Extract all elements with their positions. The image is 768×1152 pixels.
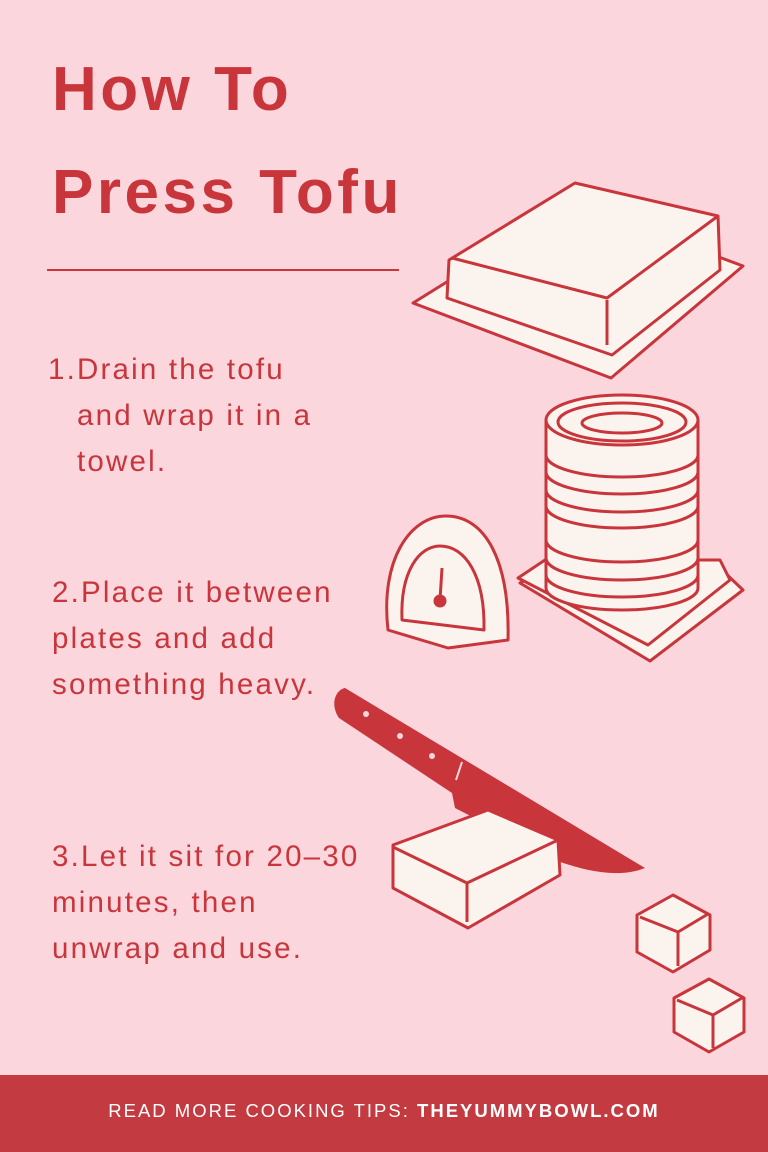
- step 3: [52, 840, 360, 965]
- title: Press Tofu: [52, 158, 403, 227]
- title: [52, 55, 403, 227]
- step 2: 2.Place it between: [52, 576, 333, 609]
- icon: tofu cubes: [637, 895, 744, 1052]
- step 1: and wrap it in a: [77, 399, 312, 432]
- step 2: [52, 576, 333, 701]
- footer: READ MORE COOKING TIPS: THEYUMMYBOWL.COM: [108, 1100, 660, 1121]
- step 3: unwrap and use.: [52, 932, 303, 965]
- step 1: [48, 353, 312, 478]
- icon: plates and can: [518, 395, 743, 661]
- step 1: towel.: [77, 445, 167, 478]
- step 2: something heavy.: [52, 668, 316, 701]
- step 2: plates and add: [52, 622, 276, 655]
- title: How To: [52, 55, 292, 124]
- step 1: 1.: [48, 353, 77, 386]
- icon: scale: [387, 516, 508, 648]
- step 1: Drain the tofu: [77, 353, 285, 386]
- footer: [0, 1075, 768, 1152]
- icon: tofu on towel: [413, 183, 743, 378]
- step 3: minutes, then: [52, 886, 258, 919]
- icon: knife and tofu block: [334, 688, 645, 928]
- step 3: 3.Let it sit for 20–30: [52, 840, 360, 873]
